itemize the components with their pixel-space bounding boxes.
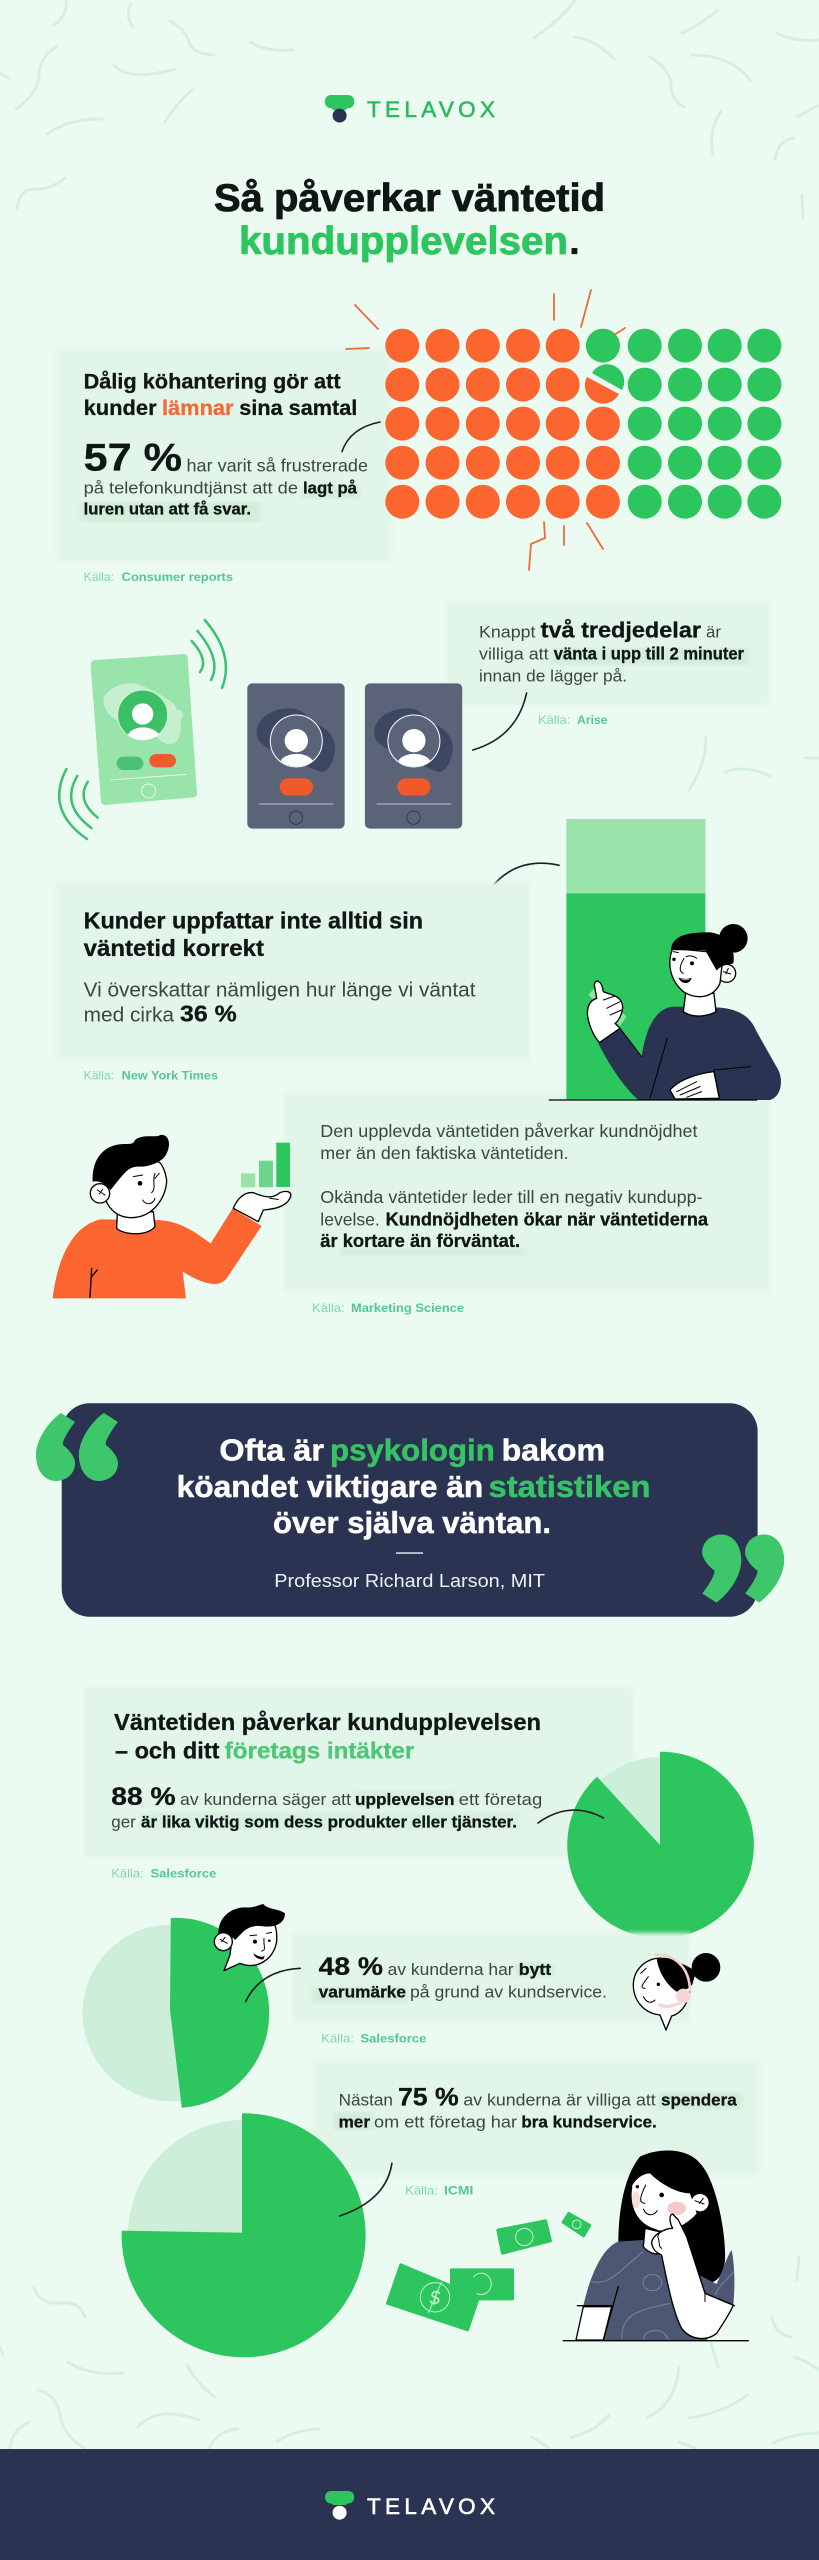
source: Salesforce top: Salesforce (150, 1866, 217, 1880)
connector: phones to text (473, 693, 527, 750)
text block: köhantering: har varit så frustrerade (186, 456, 368, 476)
source: New York Times (84, 1068, 218, 1082)
connector: pie to text 75 (340, 2163, 392, 2216)
panel: quote: statistiken (488, 1469, 650, 1504)
source: New York Times: New York Times (122, 1068, 218, 1082)
panel: 48 procent: bytt (519, 1960, 552, 1979)
source: Marketing Science: Källa: (312, 1301, 345, 1315)
connector: pie to text 88 (538, 1810, 604, 1823)
panel: väntetiden påverkar: – och ditt (115, 1737, 220, 1763)
illustration: thinking woman with long hair (563, 2151, 748, 2341)
panel: väntetiden påverkar (84, 1687, 635, 1857)
text block: köhantering (80, 370, 368, 522)
logo: Telavox footer (325, 2491, 495, 2520)
chart: pie 75 percent (122, 2113, 366, 2357)
title (214, 177, 605, 263)
illustration: man with small bar chart (53, 1135, 291, 1298)
panel: 48 procent (293, 1933, 691, 2023)
panel: väntetiden påverkar: ett företag (459, 1790, 542, 1809)
panel: 75 procent: spendera (661, 2091, 737, 2110)
logo: Telavox header: TELAVOX (367, 97, 495, 122)
panel: kunder uppfattar: med cirka (84, 1004, 175, 1027)
source: Salesforce top: Källa: (111, 1866, 144, 1880)
icon: woman headset speech bubble (633, 1953, 720, 2030)
source: Consumer reports: Consumer reports (122, 570, 233, 584)
connector: dots to text (342, 422, 380, 452)
icon: grey phone two (365, 683, 462, 829)
panel: två tredjedelar: två tredjedelar (541, 617, 701, 642)
chart: 57 percent dot grid (385, 329, 781, 519)
title: Så påverkar väntetid (214, 177, 605, 220)
panel: två tredjedelar: villiga att (479, 644, 549, 663)
text block: köhantering: kunder (84, 396, 157, 420)
source: Arise (538, 713, 608, 727)
icon: closing quotation marks (702, 1534, 784, 1602)
panel: 48 procent: av kunderna har (388, 1960, 514, 1979)
title: kundupplevelsen (239, 220, 568, 263)
panel: två tredjedelar: vänta i upp till 2 minuter (554, 643, 744, 663)
title: . (569, 220, 580, 263)
panel: väntetiden påverkar: ger (111, 1812, 136, 1831)
logo: Telavox header (325, 95, 495, 123)
source: ICMI: ICMI (444, 2183, 473, 2197)
panel: väntetiden påverkar: Väntetiden påverkar kundupplevelsen (114, 1709, 541, 1735)
source: Arise: Källa: (538, 713, 570, 727)
chart: pie 88 percent (567, 1752, 754, 1938)
panel: 75 procent: mer (339, 2112, 370, 2131)
text block: upplevd väntetid: Den upplevda väntetiden påverkar kundnöjdhet (320, 1121, 698, 1141)
source: New York Times: Källa: (84, 1068, 114, 1082)
panel: 75 procent: bra kundservice. (521, 2112, 657, 2131)
panel: quote: psykologin (330, 1432, 495, 1467)
panel: kunder uppfattar (56, 882, 530, 1060)
text block: köhantering: 57 % (84, 437, 182, 480)
text block: upplevd väntetid: mer än den faktiska väntetiden. (320, 1143, 568, 1163)
panel: två tredjedelar: Knappt (479, 622, 536, 641)
text block: köhantering: sina samtal (239, 396, 357, 420)
text block: köhantering: Dålig köhantering gör att (84, 370, 341, 394)
icon: man speech bubble head (214, 1904, 285, 1971)
panel: två tredjedelar: är (706, 622, 721, 641)
text block: köhantering: luren utan att få svar. (84, 500, 251, 519)
panel: 48 procent: varumärke (319, 1982, 406, 2001)
text block: köhantering: lämnar (162, 396, 234, 420)
chart: pie 48 percent (82, 1918, 269, 2108)
panel: 75 procent: Nästan (339, 2091, 393, 2110)
logo: Telavox footer: TELAVOX (367, 2494, 495, 2519)
panel: väntetiden påverkar: upplevelsen (355, 1790, 454, 1809)
source: Marketing Science: Marketing Science (351, 1301, 464, 1315)
panel: kunder uppfattar: 36 % (180, 1001, 237, 1027)
footer (0, 2449, 819, 2560)
source: Salesforce top (111, 1866, 217, 1880)
panel: kunder uppfattar: väntetid korrekt (84, 935, 264, 961)
panel: 75 procent: om ett företag har (374, 2112, 517, 2131)
panel: 48 procent: på grund av kundservice. (410, 1982, 607, 2001)
icon: banknotes: $ (429, 2287, 441, 2308)
illustration: woman with bun holding phone (549, 924, 781, 1100)
panel: köhantering background (56, 348, 392, 561)
source: Salesforce middle: Salesforce (360, 2031, 427, 2045)
panel: upplevd väntetid background (285, 1092, 770, 1292)
source: ICMI (405, 2183, 473, 2197)
panel: 75 procent (312, 2060, 760, 2176)
connector: pie to text 48 (246, 1968, 300, 2002)
text block: upplevd väntetid: Kundnöjdheten ökar när väntetiderna (386, 1209, 709, 1229)
panel: kunder uppfattar: Kunder uppfattar inte alltid sin (84, 907, 423, 933)
source: Marketing Science (312, 1301, 464, 1315)
icon: ringing green phone (59, 620, 226, 839)
panel: kunder uppfattar: Vi överskattar nämligen hur länge vi väntat (84, 979, 476, 1002)
source: Consumer reports (84, 570, 233, 584)
panel: 48 procent: 48 % (319, 1953, 383, 1981)
panel: 75 procent: 75 % (398, 2084, 459, 2112)
icon: grey phone one (247, 683, 345, 829)
source: Arise: Arise (577, 713, 608, 727)
panel: väntetiden påverkar: är lika viktig som dess produkter eller tjänster. (141, 1812, 517, 1831)
panel: väntetiden påverkar: företags intäkter (225, 1737, 414, 1763)
text block: upplevd väntetid: levelse. (320, 1209, 380, 1229)
text block: upplevd väntetid: är kortare än förväntat. (320, 1231, 520, 1251)
panel: väntetiden påverkar: av kunderna säger att (180, 1790, 351, 1809)
panel: quote: köandet viktigare än (177, 1469, 483, 1504)
panel: 75 procent: av kunderna är villiga att (463, 2091, 656, 2110)
panel: quote: Ofta är (219, 1432, 324, 1467)
source: Salesforce middle: Källa: (321, 2031, 354, 2045)
panel: två tredjedelar: innan de lägger på. (479, 666, 627, 685)
source: ICMI: Källa: (405, 2183, 438, 2197)
source: Consumer reports: Källa: (84, 570, 114, 584)
text block: köhantering: lagt på (303, 479, 358, 498)
connector: bar to text (485, 863, 559, 896)
panel: två tredjedelar (447, 602, 769, 705)
text block: upplevd väntetid: Okända väntetider leder till en negativ kundupp- (320, 1187, 703, 1207)
panel: quote: över själva väntan. (273, 1505, 551, 1540)
icon: orange spark lines (346, 290, 625, 570)
text block: upplevd väntetid (320, 1121, 709, 1256)
chart: perceived vs actual wait bar (566, 819, 705, 1099)
panel: quote: Professor Richard Larson, MIT (274, 1570, 545, 1591)
icon: banknotes (387, 2213, 590, 2330)
panel: quote: bakom (502, 1432, 605, 1467)
panel: quote (62, 1403, 758, 1617)
icon: opening quotation marks (36, 1413, 118, 1481)
text block: köhantering: på telefonkundtjänst att de (84, 479, 298, 498)
panel: väntetiden påverkar: 88 % (111, 1783, 176, 1811)
source: Salesforce middle (321, 2031, 427, 2045)
